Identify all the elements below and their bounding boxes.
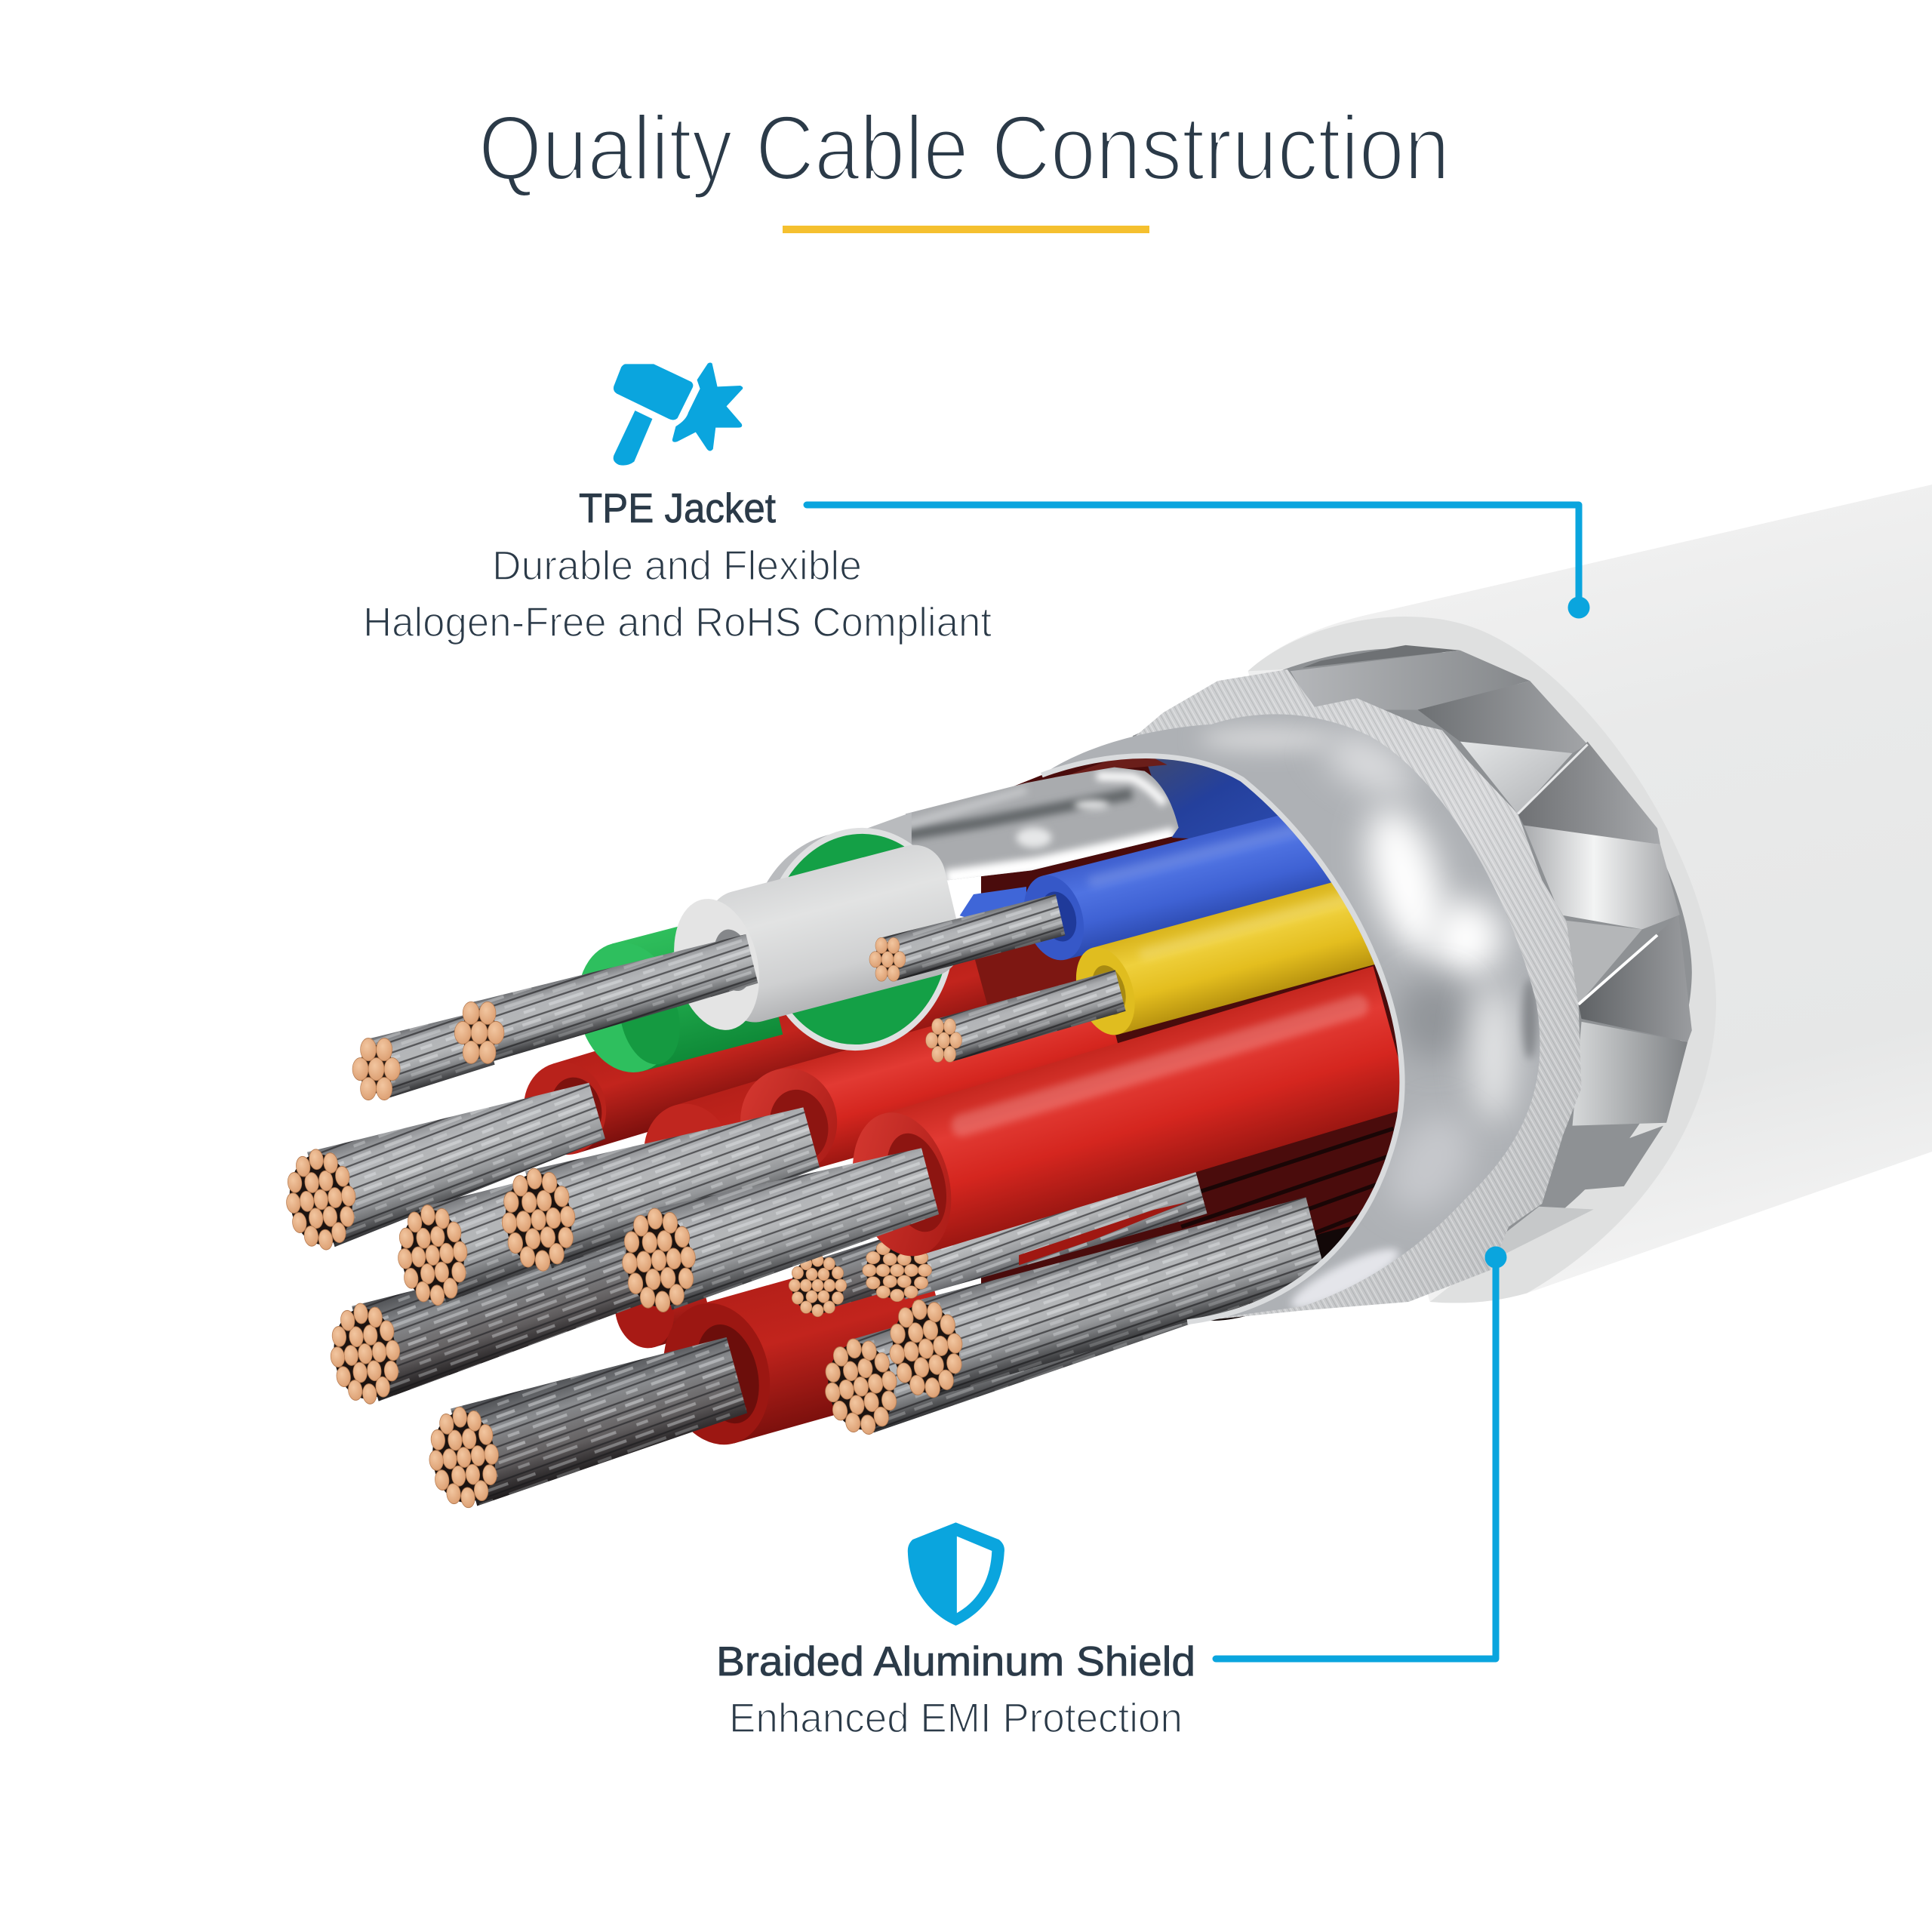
callout line: jacket <box>807 505 1589 619</box>
red wire jacket 2 <box>729 978 1128 1186</box>
foil tube opening with green interior <box>749 815 968 1063</box>
jacket body <box>1248 485 1932 1303</box>
brushed shield edge <box>1041 669 1582 1322</box>
heading: Braided Aluminum Shield: Braided Aluminum Shield <box>716 1638 1195 1684</box>
icon: hammer and impact <box>614 362 743 466</box>
title underline <box>783 226 1149 233</box>
braid opening <box>1133 648 1692 1302</box>
white wire <box>662 838 968 1040</box>
text: Enhanced EMI Protection: Enhanced EMI Protection <box>729 1694 1183 1741</box>
silver dome with highlights <box>1041 714 1540 1322</box>
jacket end ring <box>1248 617 1716 1303</box>
icon: shield <box>908 1522 1004 1626</box>
red jacket small rear <box>607 1256 715 1355</box>
dark red sliver <box>1062 755 1168 777</box>
title: Quality Cable Construction <box>478 97 1450 199</box>
right bundle conductor 2 <box>874 1188 1330 1411</box>
conductor lower front <box>408 1321 752 1524</box>
conductor front <box>601 1125 945 1328</box>
conductor middle left <box>377 1128 678 1321</box>
yellow wire <box>1066 868 1410 1041</box>
thin conductor to yellow wire <box>915 965 1127 1072</box>
right bundle conductor 1 <box>809 1223 1254 1447</box>
red wire jacket 1 <box>513 938 994 1165</box>
red reflection between conductors <box>1019 1202 1187 1265</box>
red jacket front <box>838 966 1411 1269</box>
white TPE jacket with exposed braid <box>981 485 1932 1354</box>
rear conductor with copper end 2 <box>847 1141 1208 1321</box>
inner wires and copper conductors <box>338 812 1128 1215</box>
blue wire <box>1014 792 1394 967</box>
folded braid facets <box>1291 645 1692 1264</box>
cable interior <box>981 756 1402 1354</box>
conductor lower left rear <box>309 1214 657 1420</box>
dark red filler <box>921 900 1157 1032</box>
green wire <box>565 907 783 1084</box>
foil shielded tube left part <box>764 812 912 937</box>
lower conductor bundles <box>265 966 1411 1524</box>
text: Halogen-Free and RoHS Compliant: Halogen-Free and RoHS Compliant <box>363 598 992 645</box>
thin conductor 2 <box>440 924 761 1076</box>
cable illustration <box>265 485 1932 1524</box>
red jacket lower <box>649 1241 958 1457</box>
rear conductor with copper end 1 <box>773 1137 1198 1333</box>
thin conductor 1 <box>338 1002 497 1112</box>
deep blue behind foil <box>1145 756 1288 843</box>
red wire jacket behind <box>633 1063 840 1215</box>
heading: TPE Jacket: TPE Jacket <box>579 485 776 531</box>
conductor upper left large <box>265 1057 613 1266</box>
conductor center <box>481 1082 826 1287</box>
foil shield region behind wires <box>906 755 1288 1032</box>
foil body with highlights <box>906 768 1179 881</box>
small blue wire behind <box>960 887 1026 918</box>
callout line: shield <box>1216 1247 1506 1659</box>
thin conductor to blue wire <box>860 890 1066 990</box>
folded aluminum shield <box>1041 669 1582 1322</box>
text: Durable and Flexible: Durable and Flexible <box>492 542 862 589</box>
